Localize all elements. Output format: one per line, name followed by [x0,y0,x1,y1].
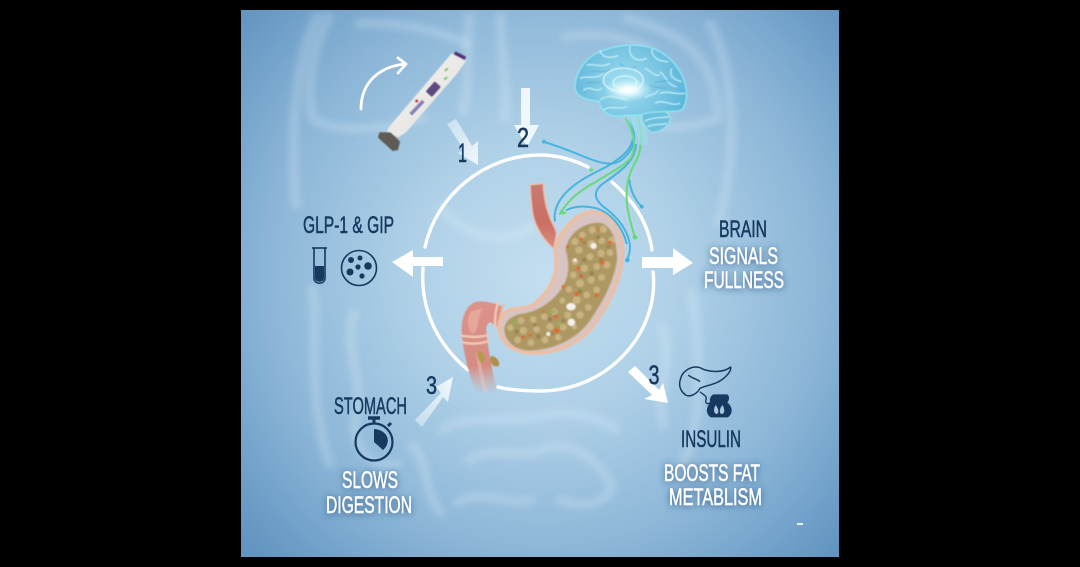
text: SIGNALS: SIGNALS [709,243,778,270]
blue nerve fibers [544,120,642,260]
small watermark mark [797,523,803,525]
text: BOOSTS FAT: BOOSTS FAT [664,460,760,487]
brain stem [625,113,648,145]
text: METABLISM: METABLISM [669,484,762,511]
step arrow 2 [514,88,539,147]
white cycle ring [423,155,654,391]
pancreas outline [680,367,731,396]
text: DIGESTION: DIGESTION [326,492,412,519]
stomach outer wall [497,210,624,355]
left output arrow [392,250,443,277]
icon: stopwatch [356,418,392,460]
pancreatic duct [700,392,711,404]
step arrow 1 [447,119,478,165]
green nerve endings [559,168,637,240]
brain light flare [603,78,653,102]
icon: test tube [312,248,327,283]
injection pen [378,53,466,151]
pen brand mark [411,101,423,114]
text: FULLNESS: FULLNESS [704,267,784,294]
step number 3 right: 3 [648,360,660,390]
food contents [504,223,617,351]
cerebellum [642,110,671,132]
step number 1: 1 [458,138,467,168]
right output arrow [642,248,693,275]
step arrow 3 to stomach [415,377,453,427]
brain folds [580,47,685,127]
curved rotation arrow [361,58,406,109]
stomach cavity [500,213,622,352]
pen body [387,53,466,138]
step number 3 left: 3 [426,372,437,400]
pen green indicators [444,68,448,80]
duodenum [461,301,504,394]
green nerve fibers [560,113,641,237]
panel: blue anatomical background [241,10,839,557]
stomach illustration [461,183,624,394]
nerve pathways from brain to stomach [542,113,644,262]
step arrow 3 to insulin [628,366,668,403]
stomach wall and food [497,210,624,355]
label: STOMACH: STOMACH [334,393,407,420]
bottle shape [707,394,732,417]
text: SLOWS: SLOWS [342,467,398,494]
label: GLP-1 & GIP: GLP-1 & GIP [303,212,394,239]
pen base [378,132,400,151]
icon: pancreas and insulin bottle [680,367,732,417]
pen label [425,81,441,97]
blue nerve endings [542,140,644,262]
esophagus [530,183,557,249]
cerebrum [575,45,686,116]
label: INSULIN: INSULIN [681,426,741,453]
icon: petri dish [342,250,376,286]
brain illustration [575,45,686,145]
darker brain grooves [587,63,670,88]
label: BRAIN: BRAIN [719,216,767,243]
step number 2: 2 [517,122,529,153]
pen purple end cap [455,53,465,58]
pen collar [387,131,400,144]
droplets in bottle [714,405,724,414]
inner brain rings [603,68,643,92]
